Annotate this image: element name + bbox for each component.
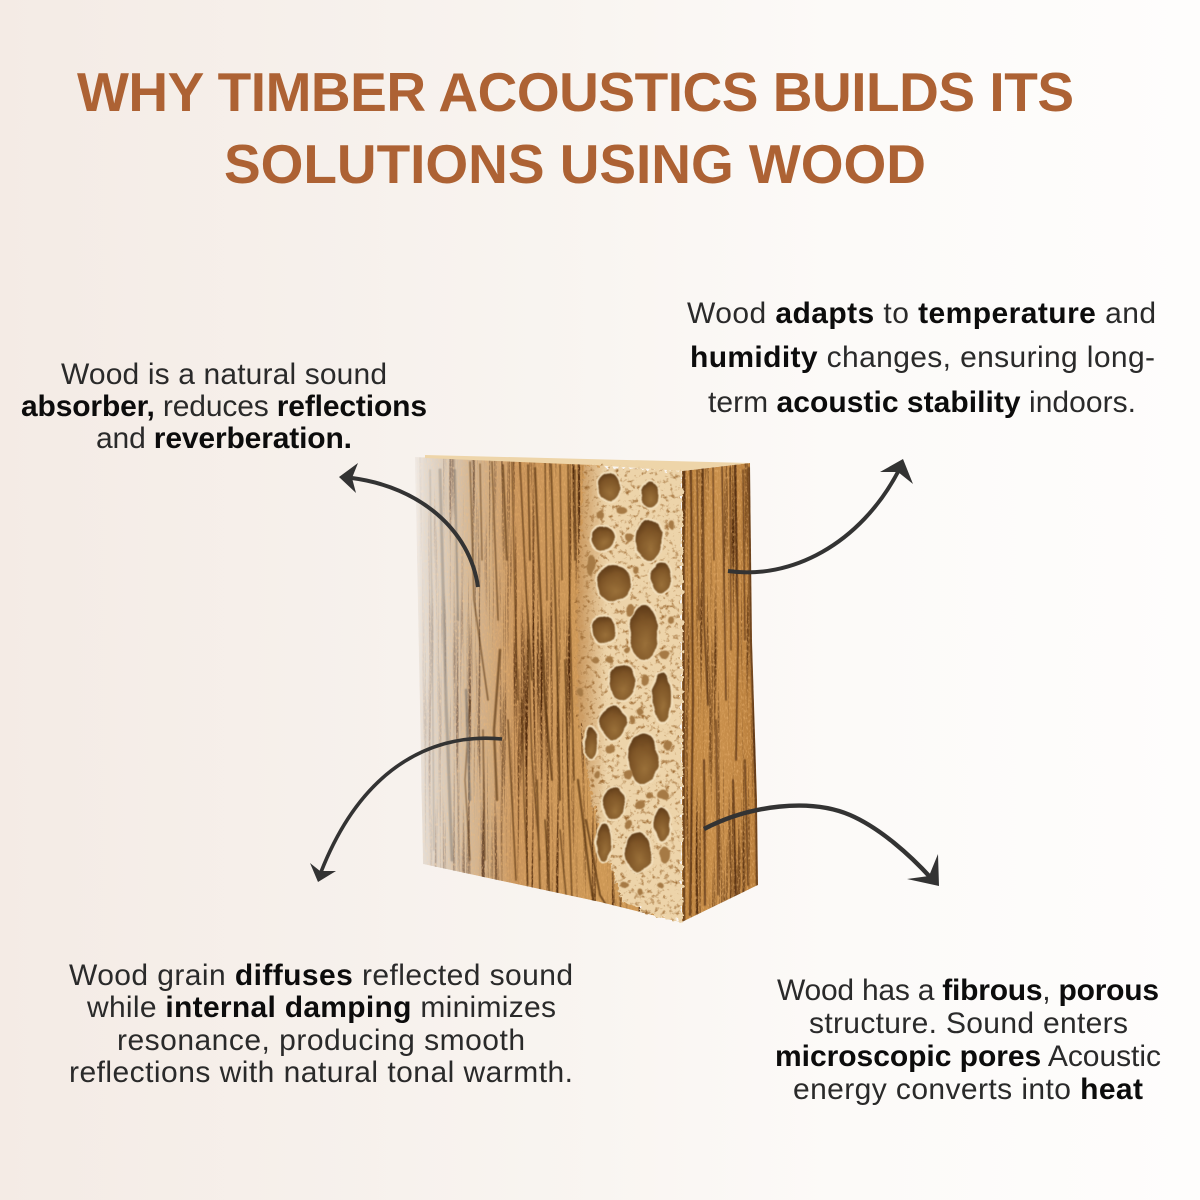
text block: grain diffusion: Wood grain diffuses reflected sound (69, 959, 573, 992)
text block: temperature and humidity (687, 297, 1156, 419)
text block: temperature and humidity: humidity changes, ensuring long- (690, 341, 1155, 374)
text block: temperature and humidity: term acoustic stability indoors. (708, 386, 1136, 419)
text block: grain diffusion: reflections with natural tonal warmth. (69, 1056, 573, 1089)
title: SOLUTIONS USING WOOD (224, 133, 926, 195)
main wood face (415, 457, 680, 922)
main face grain lines (430, 462, 606, 905)
text block: sound absorber: absorber, reduces reflections (21, 390, 427, 423)
side face grain lines (684, 465, 757, 921)
large pores (584, 472, 672, 872)
arrow: to porous text (704, 806, 939, 886)
text block: sound absorber: and reverberation. (96, 422, 352, 455)
arrow: to absorber text (339, 463, 478, 587)
text block: grain diffusion (69, 959, 573, 1089)
title: WHY TIMBER ACOUSTICS BUILDS ITS (77, 61, 1074, 123)
text block: temperature and humidity: Wood adapts to temperature and (687, 297, 1156, 330)
top edge (425, 455, 750, 471)
text block: grain diffusion: while internal damping minimizes (86, 991, 556, 1024)
text block: sound absorber (21, 358, 427, 455)
text block: porous structure: microscopic pores Acoustic (775, 1040, 1161, 1073)
arrow: to adapts text (728, 459, 913, 572)
text block: porous structure: structure. Sound enters (809, 1007, 1128, 1040)
porous core band (576, 465, 682, 922)
text block: sound absorber: Wood is a natural sound (61, 358, 387, 391)
text block: porous structure: energy converts into heat (793, 1073, 1143, 1106)
small pores (578, 506, 675, 895)
side wood face (682, 463, 758, 922)
title (77, 61, 1074, 195)
arrow: to grain text (310, 738, 502, 882)
wood block illustration (415, 455, 758, 922)
text block: porous structure (775, 974, 1161, 1106)
text block: porous structure: Wood has a fibrous, porous (777, 974, 1159, 1007)
text block: grain diffusion: resonance, producing smooth (117, 1024, 525, 1057)
